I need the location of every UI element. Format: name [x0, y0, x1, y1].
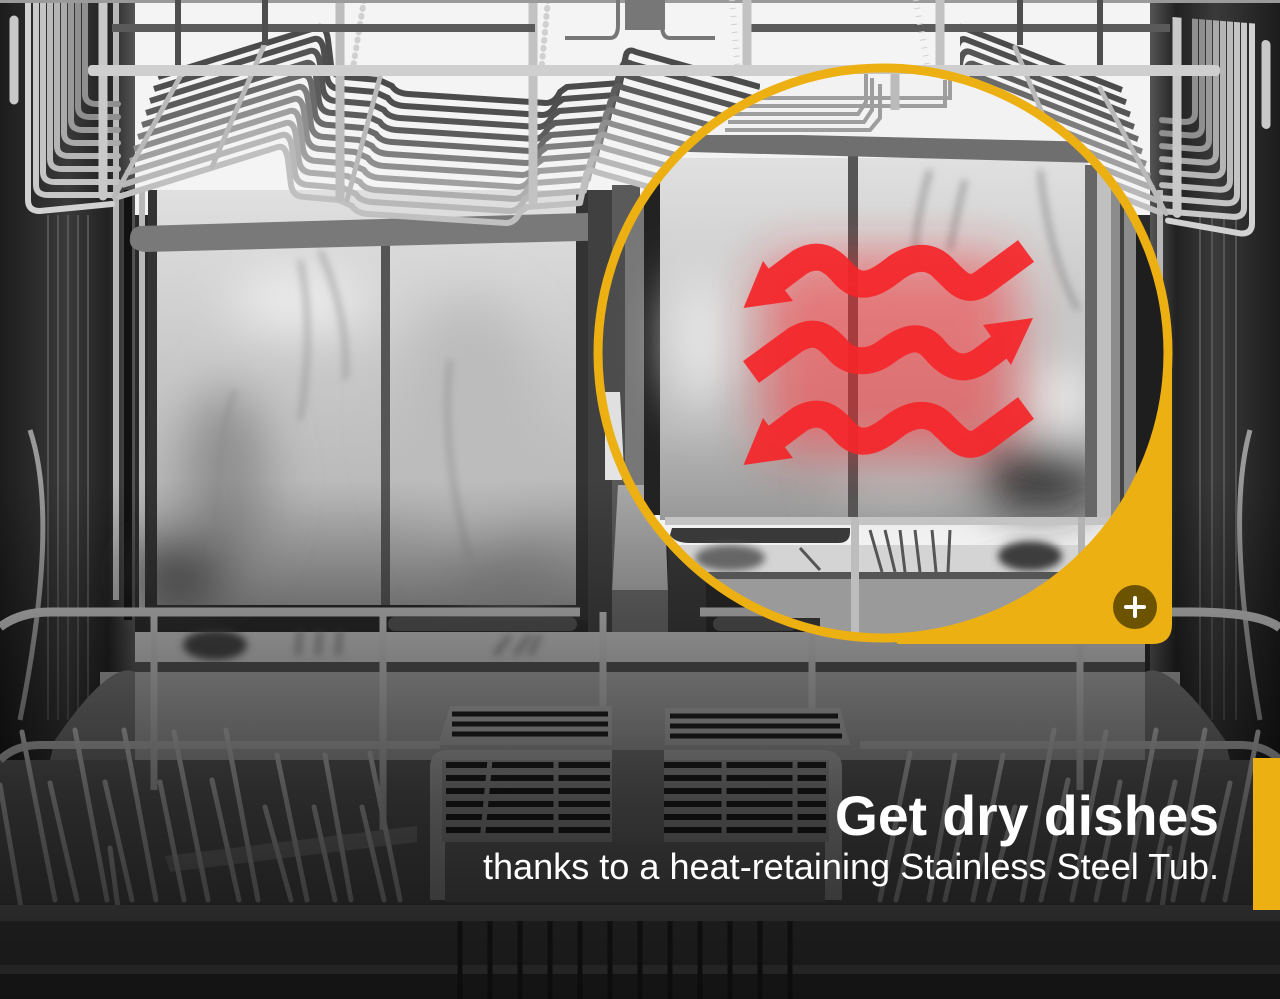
cutlery basket: [430, 706, 850, 902]
lower rack tines right: [880, 730, 1280, 960]
spray arm: [130, 212, 620, 252]
bright rear wall above the panel: [125, 0, 1165, 215]
lower rack front bars: [0, 905, 1280, 999]
lower rack tines left: [0, 730, 400, 960]
heat glow: [762, 255, 1017, 455]
top arrow pointing left: [744, 251, 1026, 308]
lower tub reflection: [0, 630, 1280, 999]
right side wall: [1150, 0, 1280, 760]
magnified photo: [590, 60, 1180, 650]
accent bar: [1253, 758, 1280, 910]
plus button: [1113, 585, 1157, 629]
lower spray arm: [165, 826, 417, 872]
left side wall: [0, 0, 135, 760]
upper rack front rail: [88, 65, 1220, 76]
magnified upper rack wires: [725, 65, 950, 130]
magnified panel seam: [848, 155, 858, 520]
darkening overlay: [0, 480, 1280, 999]
magnifier: zoomed steel tub with heat arrows: [590, 60, 1180, 650]
central column: [588, 185, 706, 800]
bottom arrow pointing left: [744, 408, 1026, 465]
upper rack left half: [14, 0, 760, 223]
upper rack right half: [960, 17, 1270, 236]
magnifier ring: [598, 68, 1168, 638]
panel centre seam: [381, 245, 390, 605]
steel rear panel: [135, 190, 588, 620]
lower rack rails and uprights: [0, 612, 1280, 830]
caption: [483, 785, 1219, 887]
magnified side column: [602, 243, 625, 463]
magnified top rail: [855, 72, 912, 74]
magnified rack rail: [665, 517, 1097, 634]
yellow corner of magnifier: [883, 353, 1172, 644]
subheading: thanks to a heat-retaining Stainless Steel Tub.: [483, 846, 1219, 887]
heat arrows: [744, 251, 1033, 465]
side wall ribs: [20, 0, 1260, 720]
middle arrow pointing right: [751, 318, 1033, 372]
magnified steel panel: [660, 158, 1088, 520]
magnified spray arm: [688, 135, 1090, 163]
magnified right bars: [1085, 165, 1164, 518]
heading: Get dry dishes: [835, 785, 1219, 847]
upper rack cross wires: [0, 0, 1280, 75]
